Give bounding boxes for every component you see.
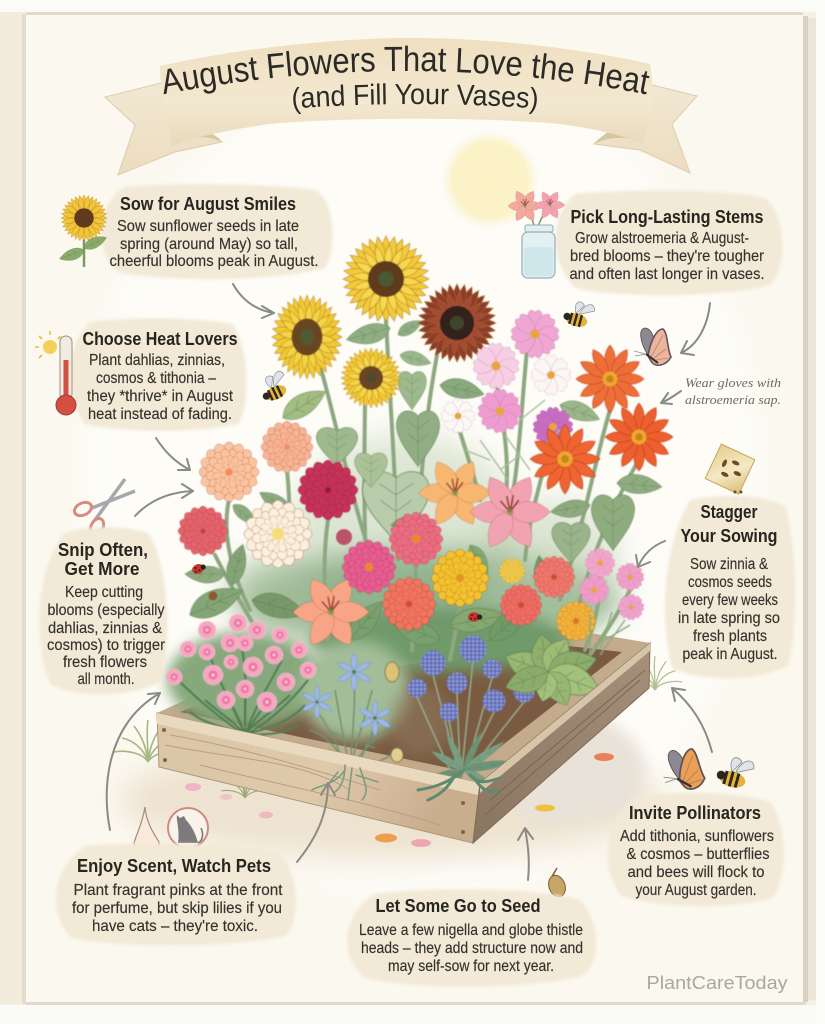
callout: Sow for August Smiles: spring (around May) so tall, [120, 236, 298, 253]
callout: Snip Often, Get More: fresh flowers [63, 654, 147, 671]
callout: Choose Heat Lovers: Choose Heat Lovers [82, 329, 238, 349]
callout: Enjoy Scent, Watch Pets: Enjoy Scent, Watch Pets [77, 856, 271, 876]
icon: scissors [72, 479, 135, 538]
sunflowers [231, 186, 542, 443]
icon: nose line drawing [134, 807, 159, 849]
ladybugs [191, 562, 482, 622]
callout: Stagger Your Sowing [665, 496, 795, 678]
raised wooden bed front [157, 643, 650, 843]
callout: Pick Long-Lasting Stems: Grow alstroemeria & August- [575, 230, 749, 247]
callout: Let Some Go to Seed: Leave a few nigella and globe thistle [359, 922, 583, 939]
leaves of tall plants [184, 316, 663, 651]
banner left tail [105, 82, 222, 175]
stems [215, 320, 636, 660]
banner right tail [594, 82, 697, 173]
callout: Sow for August Smiles: Sow sunflower seeds in late [117, 218, 299, 235]
sunflower: burgundy [372, 238, 542, 408]
callout: Snip Often, Get More: dahlias, zinnias & [48, 620, 162, 637]
callout: Pick Long-Lasting Stems [555, 191, 782, 295]
arrow: invite pollinators [672, 688, 712, 752]
callout: Let Some Go to Seed: Let Some Go to Seed [376, 896, 540, 916]
callout: Enjoy Scent, Watch Pets: have cats – they're toxic. [92, 918, 258, 935]
note: wear gloves [685, 375, 781, 407]
icon: small sunflower [34, 168, 134, 268]
bee near dahlias [256, 370, 292, 404]
callout: Stagger Your Sowing: cosmos seeds [688, 574, 772, 591]
icon: no cats sign [168, 808, 208, 848]
lilies [293, 457, 550, 650]
callout: Snip Often, Get More: all month. [78, 671, 134, 688]
callout: Invite Pollinators: Invite Pollinators [629, 803, 761, 823]
icon: seed pod [546, 868, 568, 899]
note: wear gloves: Wear gloves with [685, 375, 781, 390]
callout: Choose Heat Lovers: they *thrive* in August [87, 388, 234, 405]
callout: Sow for August Smiles: cheerful blooms peak in August. [110, 253, 318, 270]
sun glow [440, 130, 540, 230]
arrow: pick long-lasting to flowers [681, 303, 710, 355]
callout: Invite Pollinators [607, 793, 784, 906]
callout: Choose Heat Lovers: cosmos & tithonia – [96, 370, 216, 387]
callout: Stagger Your Sowing: Your Sowing [680, 526, 778, 546]
callout: Pick Long-Lasting Stems: Pick Long-Lasting Stems [570, 207, 764, 227]
plant foliage backdrop [225, 435, 620, 650]
callout: Sow for August Smiles [102, 184, 332, 279]
note: wear gloves: alstroemeria sap. [685, 392, 781, 407]
banner ribbon body [160, 38, 652, 146]
orange daisies [530, 345, 673, 494]
callout: Sow for August Smiles: Sow for August Smiles [120, 194, 296, 214]
butterfly upper right [634, 328, 671, 365]
callout: Enjoy Scent, Watch Pets: for perfume, but skip lilies if you [72, 900, 282, 917]
pinks (dianthus) [166, 614, 316, 735]
small pink cosmos on right [579, 548, 644, 655]
callout: Snip Often, Get More: cosmos) to trigger [47, 637, 166, 654]
sunflower: small [306, 313, 436, 443]
callout: Snip Often, Get More: blooms (especially [48, 602, 164, 619]
dahlias [157, 399, 383, 597]
callout: Stagger Your Sowing: in late spring so [678, 610, 780, 627]
callout: Snip Often, Get More: Get More [64, 559, 140, 579]
arrow: enjoy scent to pinks [107, 693, 160, 830]
callout: Invite Pollinators: & cosmos – butterflies [626, 846, 770, 863]
pollinators in the garden [256, 299, 671, 404]
arrow: choose heat lovers to dahlias [156, 438, 190, 470]
leafy plant at right of bed [501, 632, 605, 711]
banner subtitle text: (and Fill Your Vases) [293, 83, 537, 114]
callout: Stagger Your Sowing: every few weeks [682, 592, 778, 609]
overhanging foliage on front plank [312, 765, 500, 800]
fallen petals [185, 753, 614, 847]
arrow: gloves note [661, 391, 681, 404]
ground wash under the raised bed [114, 656, 682, 860]
callout: Stagger Your Sowing: Stagger [700, 502, 758, 522]
callout: Snip Often, Get More: Keep cutting [65, 584, 143, 601]
banner title text: August Flowers That Love the Heat [164, 46, 650, 94]
arrow: let some go to seed [518, 828, 533, 880]
title banner [104, 38, 698, 176]
cosmos flowers [441, 310, 573, 480]
callout: Enjoy Scent, Watch Pets: Plant fragrant pinks at the front [74, 882, 283, 899]
foliage covering back of bed [167, 608, 570, 755]
callout: Pick Long-Lasting Stems: and often last longer in vases. [570, 266, 764, 283]
bee near cosmos [562, 299, 596, 330]
callout: Stagger Your Sowing: fresh plants [693, 628, 767, 645]
callout: Snip Often, Get More [39, 527, 167, 694]
callout: Pick Long-Lasting Stems: bred blooms – they're tougher [570, 248, 765, 265]
bed: right plank [473, 643, 650, 843]
sunflower: left [231, 246, 383, 428]
callout: Enjoy Scent, Watch Pets [56, 843, 296, 945]
callout: Let Some Go to Seed [347, 889, 596, 987]
icon: mason jar with flowers [508, 189, 565, 278]
callout: Invite Pollinators: your August garden. [636, 882, 756, 899]
callout: Invite Pollinators: Add tithonia, sunflowers [620, 828, 774, 845]
callout: Choose Heat Lovers: Plant dahlias, zinnias, [89, 352, 225, 369]
raised bed: soil and far rails [157, 628, 650, 783]
callout: Stagger Your Sowing: Sow zinnia & [690, 556, 768, 573]
icon: thermometer and sun [35, 331, 76, 415]
zinnias [319, 489, 613, 658]
arrow: enjoy scent to bed [297, 783, 335, 862]
globe thistles [408, 636, 534, 807]
arrow: snip to dahlias [135, 484, 193, 516]
arrow: sow to sunflowers [233, 284, 274, 318]
watermark: PlantCareToday [646, 973, 788, 993]
icon: seed packet [705, 444, 755, 502]
callout: Choose Heat Lovers: heat instead of fading. [88, 406, 232, 423]
callout: Let Some Go to Seed: may self-sow for next year. [388, 958, 554, 975]
banner folds [172, 131, 642, 146]
bed: long left-front plank [157, 713, 480, 843]
nigella flowers [300, 653, 403, 795]
arrow: stagger to bed [636, 541, 665, 567]
callout: Let Some Go to Seed: heads – they add structure now and [361, 940, 583, 957]
callout: Stagger Your Sowing: peak in August. [682, 646, 778, 663]
icons: butterfly and bee near Invite Pollinators [660, 747, 755, 793]
arrows [107, 284, 712, 880]
callout: Choose Heat Lovers [71, 318, 246, 431]
callout: Invite Pollinators: and bees will flock to [628, 864, 765, 881]
sunflower: tall centre [293, 186, 479, 372]
callout: Snip Often, Get More: Snip Often, [58, 540, 148, 560]
